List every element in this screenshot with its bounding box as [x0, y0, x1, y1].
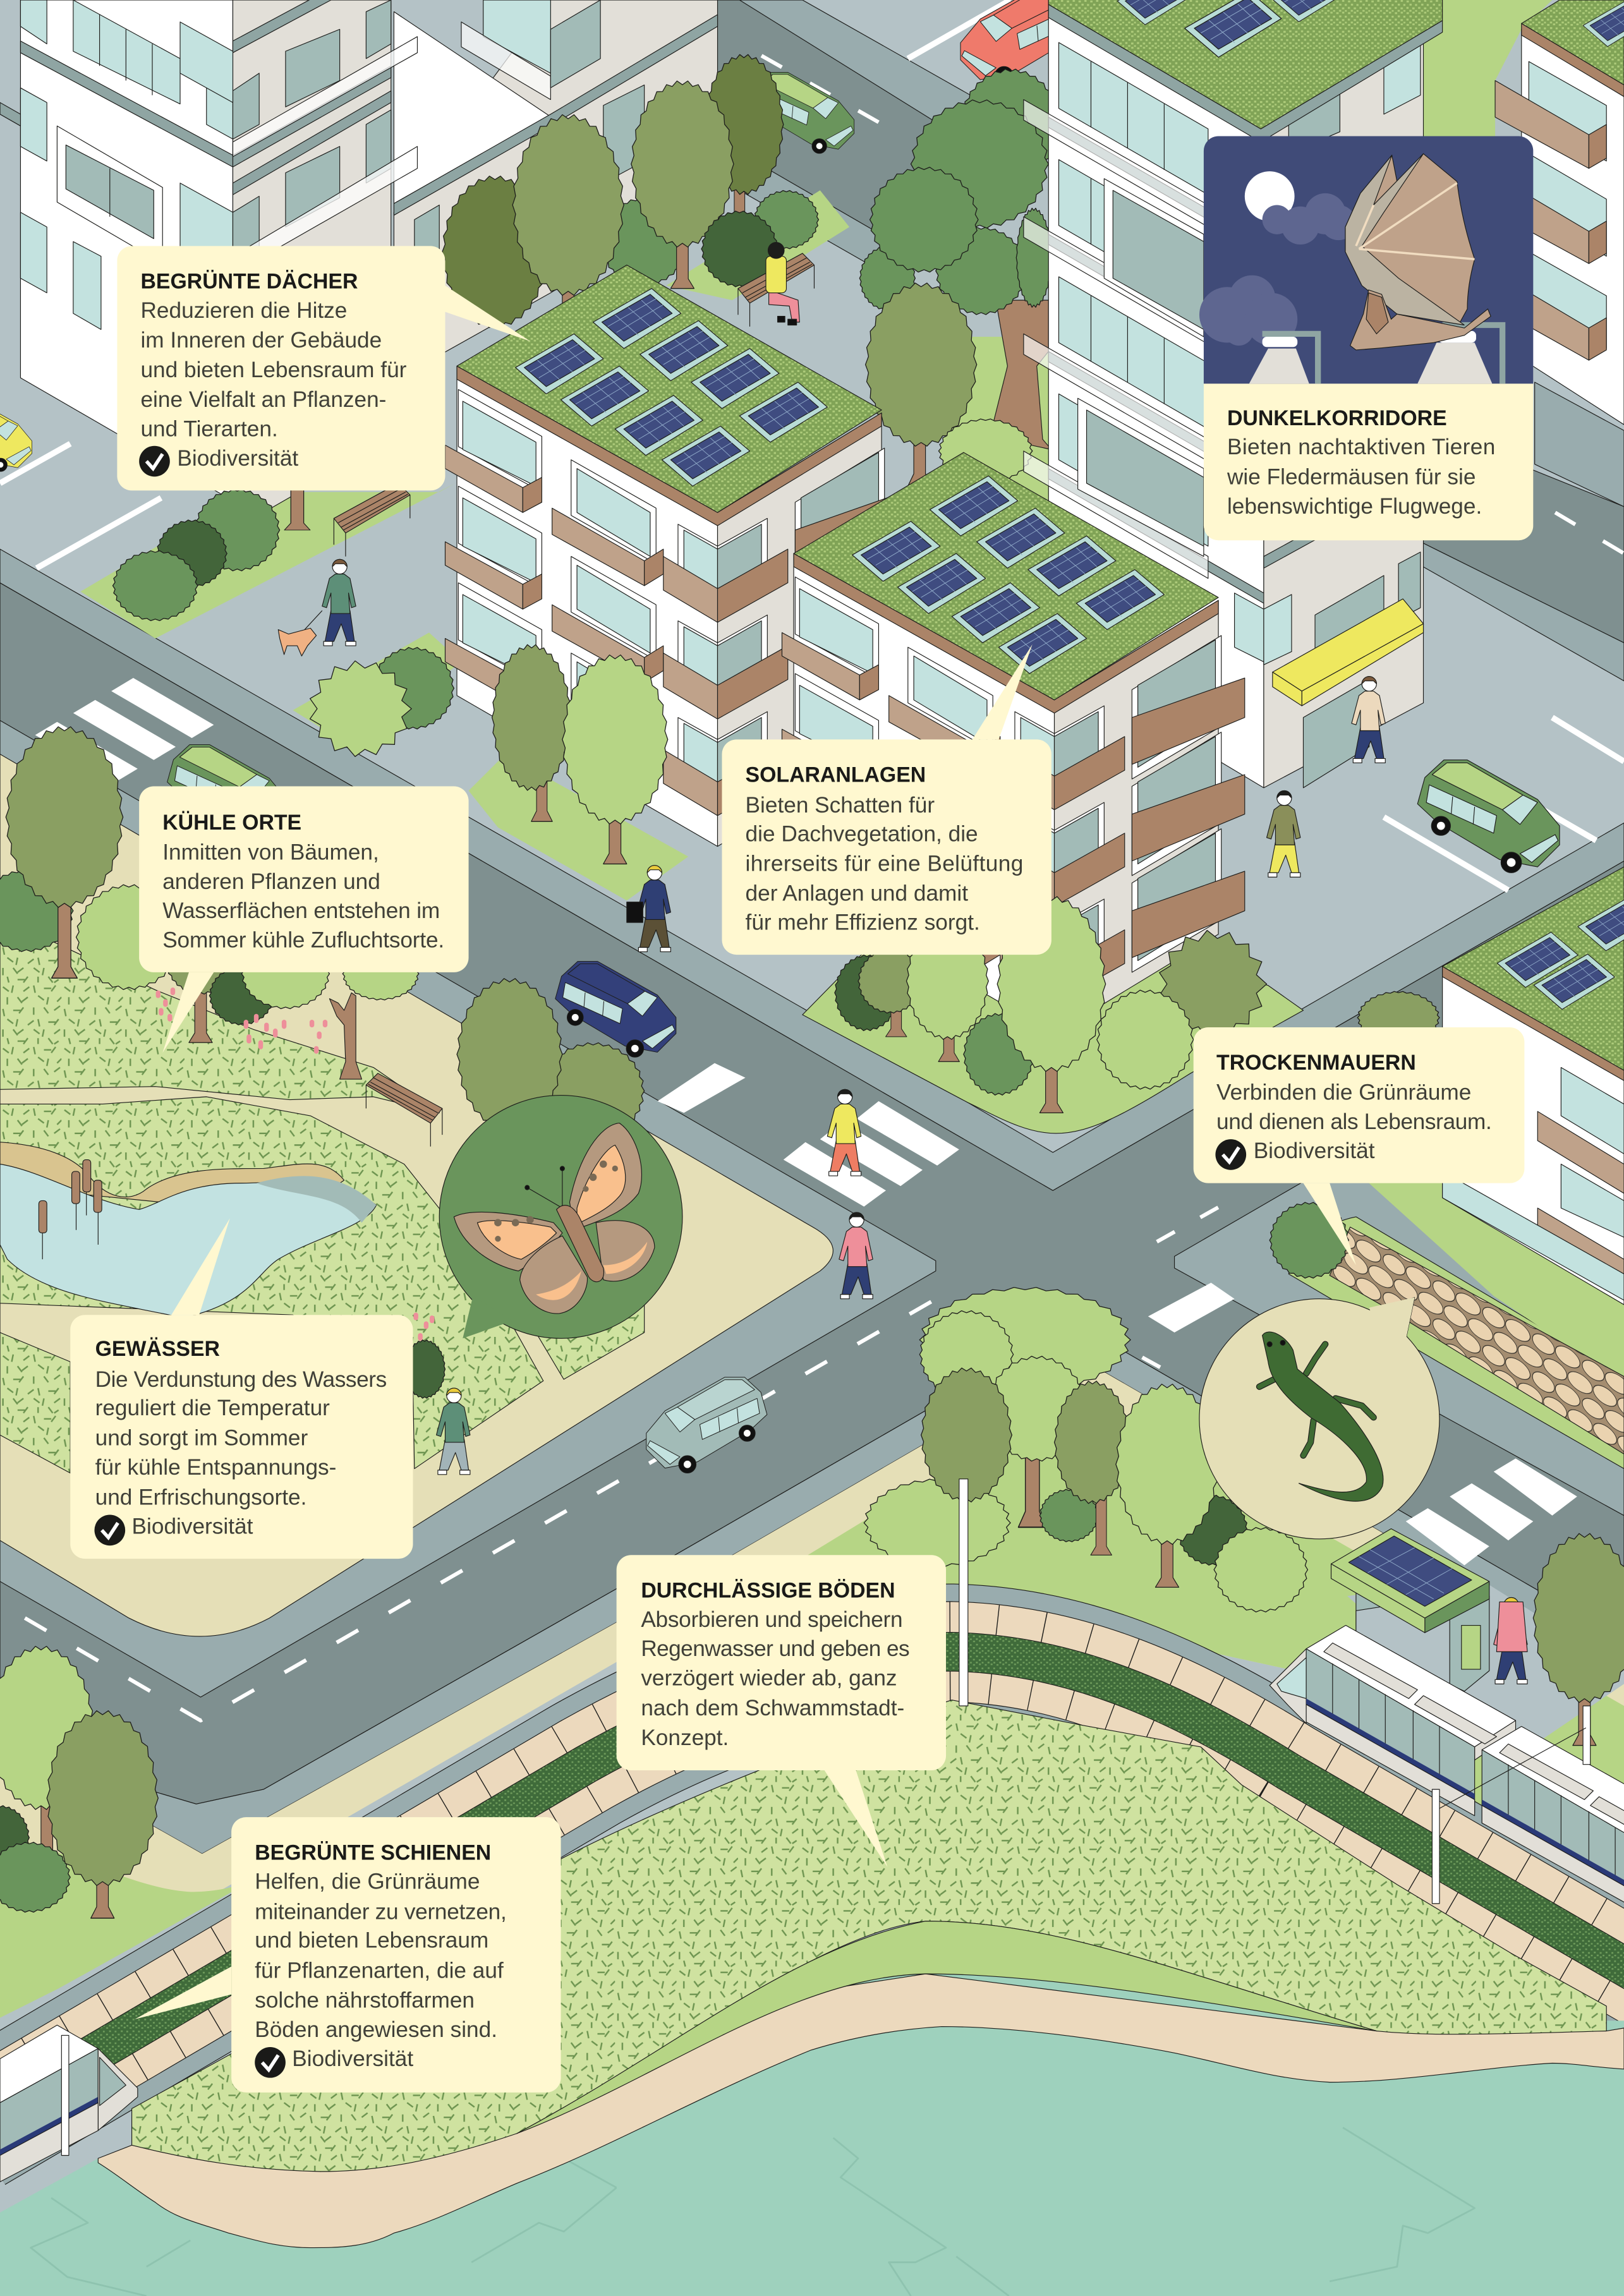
person with briefcase: [627, 866, 670, 952]
butterfly speech circle: [439, 1096, 682, 1338]
ground greens upper: [80, 0, 1552, 1133]
dry stone wall: [1330, 1227, 1624, 1454]
body text: im Inneren der Gebäude: [140, 328, 382, 353]
lamp poles: [959, 1479, 1591, 1904]
tram left: [0, 2025, 138, 2182]
body text: der Anlagen und damit: [746, 881, 968, 905]
green car behind trees: [752, 72, 854, 154]
left lawn trees: [0, 1646, 158, 1918]
body text: und bieten Lebensraum: [255, 1928, 488, 1952]
meadow: permeable soil: [132, 1700, 1606, 2172]
callout: Gewässer: [70, 1218, 413, 1559]
body text: Die Verdunstung des Wassers: [95, 1367, 387, 1392]
heading: BEGRÜNTE DÄCHER: [140, 270, 358, 294]
park walker: [437, 1388, 470, 1475]
yellow car: [0, 398, 32, 471]
body text: Bieten Schatten für: [746, 793, 935, 818]
rail corridor with paving and green track: [0, 1652, 1624, 2126]
body text: solche nährstoffarmen: [255, 1988, 475, 2012]
red car: [960, 0, 1088, 85]
body text: Regenwasser und geben es: [641, 1636, 909, 1661]
tower with green roof and solar panels: [1024, 0, 1443, 788]
callout: Durchlässige Böden: [617, 1555, 946, 1867]
callout: Begrünte Schienen: [135, 1817, 561, 2093]
callout: Solaranlagen: [722, 644, 1051, 955]
body text: die Dachvegetation, die: [746, 822, 978, 847]
icon: biodiversity check: [1215, 1139, 1246, 1170]
body text: Konzept.: [641, 1725, 729, 1750]
man in yellow trousers: [1267, 791, 1300, 877]
big tree cluster near tower: [859, 69, 1060, 486]
top right apartment building: [1495, 0, 1624, 425]
first building with green roof and solar panels: [445, 265, 908, 847]
callout: Kühle Orte: [139, 787, 469, 1053]
callout: Trockenmauern: [1194, 1027, 1524, 1265]
trees in front of first building: [492, 644, 668, 864]
body text: Bieten nachtaktiven Tieren: [1227, 435, 1496, 459]
body text: Verbinden die Grünräume: [1216, 1080, 1471, 1105]
body text: und sorgt im Sommer: [95, 1425, 308, 1450]
heading: KÜHLE ORTE: [162, 811, 301, 835]
top left apartment tower: [0, 0, 718, 530]
park trees and flowers: [0, 727, 645, 1398]
trees behind first building: [442, 54, 818, 328]
trees of lower block: [864, 1202, 1624, 1746]
body text: für Pflanzenarten, die auf: [255, 1958, 504, 1983]
park block: [0, 720, 936, 1697]
panel: Dunkelkorridore: [1199, 136, 1533, 540]
body text: reguliert die Temperatur: [95, 1396, 330, 1420]
sand beach: [98, 1974, 1624, 2248]
tram stop sidewalk: [1347, 1578, 1624, 1743]
icon: biodiversity check: [255, 2047, 286, 2078]
woman at the shop: [1352, 677, 1385, 763]
body text: Reduzieren die Hitze: [140, 298, 347, 323]
body text: verzögert wieder ab, ganz: [641, 1666, 897, 1691]
body text: nach dem Schwammstadt-: [641, 1696, 904, 1720]
lizard speech circle: [1199, 1297, 1439, 1539]
trees of the upper block: [835, 897, 1439, 1113]
body text: Absorbieren und speichern: [641, 1607, 902, 1632]
body text: lebenswichtige Flugwege.: [1227, 494, 1482, 519]
icon: butterfly: [454, 1123, 655, 1314]
green car on the left road: [167, 745, 288, 840]
yellow awning: [1273, 599, 1424, 706]
body text: für mehr Effizienz sorgt.: [746, 910, 980, 935]
heading: TROCKENMAUERN: [1216, 1051, 1416, 1075]
street lamps: [1249, 325, 1503, 384]
heading: BEGRÜNTE SCHIENEN: [255, 1840, 491, 1864]
body text: ihrerseits für eine Belüftung: [746, 851, 1024, 876]
body text: Inmitten von Bäumen,: [162, 840, 379, 864]
body text: Helfen, die Grünräume: [255, 1870, 480, 1894]
right lower apartment building: [1443, 867, 1624, 1305]
bushes and bench on the left sidewalk: [112, 478, 454, 756]
icon: bat: [1345, 154, 1491, 350]
tag: Biodiversität: [292, 2046, 413, 2071]
body text: Sommer kühle Zufluchtsorte.: [162, 927, 444, 952]
icon: biodiversity check: [94, 1515, 125, 1545]
tram right: [1270, 1626, 1624, 1917]
lower block ground: [0, 1324, 1624, 2018]
flowers: [158, 990, 432, 1338]
body text: für kühle Entspannungs-: [95, 1455, 336, 1480]
pond: [0, 1142, 377, 1318]
tag: Biodiversität: [177, 446, 298, 471]
lake water: [0, 1947, 1624, 2296]
light green lawn: [517, 1921, 1376, 2134]
body text: und Tierarten.: [140, 417, 278, 442]
heading: DUNKELKORRIDORE: [1227, 406, 1447, 430]
night sky illustration with bat: [1199, 136, 1533, 384]
callout: Begrünte Dächer: [117, 246, 530, 490]
body text: eine Vielfalt an Pflanzen-: [140, 387, 386, 412]
right block with dry stone wall: [1175, 996, 1624, 1516]
woman at tram stop: [1494, 1598, 1527, 1684]
moon: [1245, 171, 1295, 221]
reeds: [39, 1160, 102, 1259]
icon: lizard: [1259, 1332, 1383, 1501]
crosswalks: [35, 678, 1577, 1566]
heading: SOLARANLAGEN: [746, 763, 926, 787]
icon: biodiversity check: [139, 446, 170, 476]
body text: und Erfrischungsorte.: [95, 1485, 306, 1510]
tag: Biodiversität: [132, 1514, 253, 1539]
body text: wie Fledermäusen für sie: [1227, 464, 1476, 489]
walkers on the sidewalks: [437, 677, 1385, 1475]
body text: und dienen als Lebensraum.: [1216, 1109, 1491, 1134]
bench and seated person: [738, 243, 814, 327]
clouds: [1199, 193, 1356, 346]
woman on crosswalk: [827, 1089, 861, 1176]
road markings: [0, 0, 1624, 1720]
woman with handbag: [839, 1212, 873, 1299]
parked green car: [1417, 760, 1560, 873]
person walking dog: [278, 559, 356, 656]
body text: Wasserflächen entstehen im: [162, 898, 440, 923]
park meadows: [0, 917, 645, 1473]
grey-green car: [646, 1377, 767, 1473]
body text: anderen Pflanzen und: [162, 869, 380, 894]
heading: DURCHLÄSSIGE BÖDEN: [641, 1579, 895, 1603]
tram stop with solar roof: [1331, 1529, 1489, 1698]
second building with green roof and solar panels: [782, 452, 1245, 1034]
road network: [0, 0, 1624, 1804]
heading: GEWÄSSER: [95, 1337, 220, 1361]
blue car: [555, 962, 676, 1057]
body text: miteinander zu vernetzen,: [255, 1900, 507, 1924]
submerged water shapes: [31, 2127, 1475, 2296]
body text: Böden angewiesen sind.: [255, 2017, 497, 2042]
body text: und bieten Lebensraum für: [140, 358, 407, 382]
tag: Biodiversität: [1254, 1139, 1375, 1163]
